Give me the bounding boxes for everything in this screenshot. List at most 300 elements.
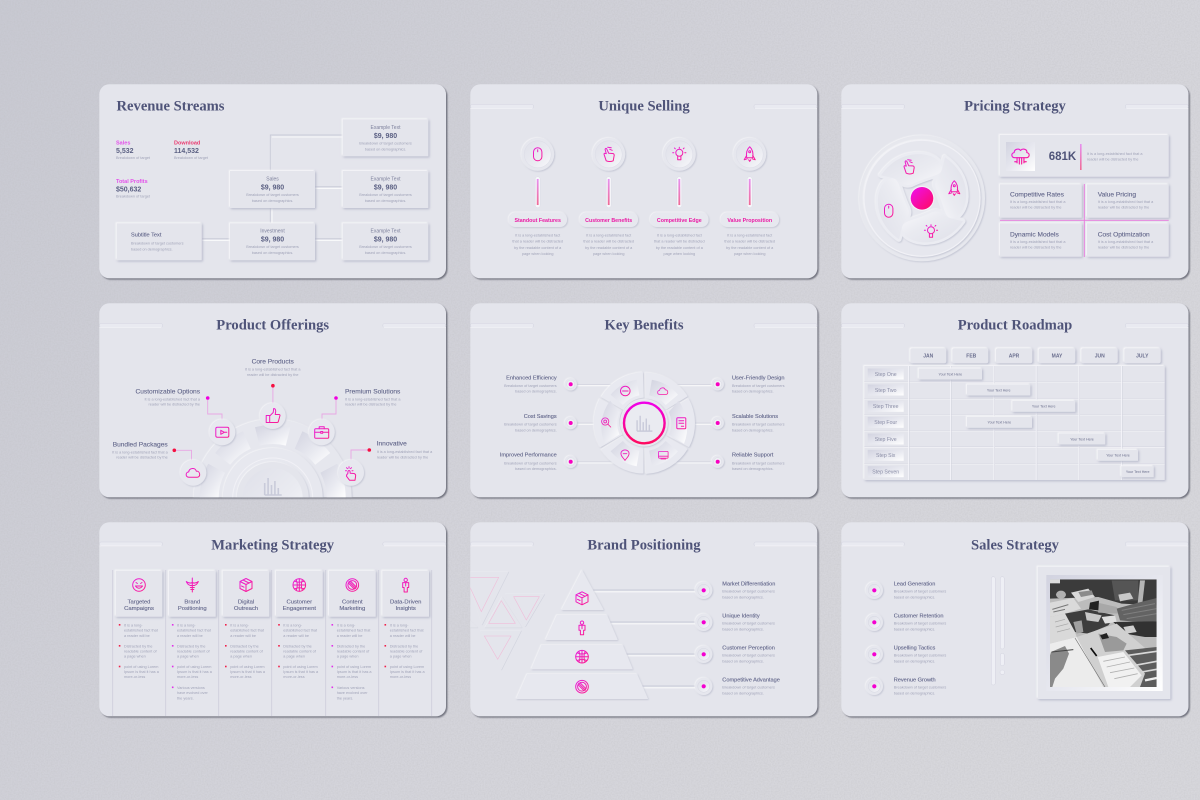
node: unique identity: Unique Identity [722, 614, 760, 620]
column: customer engagement: more-or-less [283, 675, 305, 679]
step labels: Step Six [876, 453, 896, 459]
box: example text 3: Example Text [371, 229, 401, 235]
item: value proposition [720, 138, 779, 256]
month headers: JAN [923, 354, 934, 360]
column: data-driven insights: a page when [390, 654, 412, 658]
item: customer benefits: that a reader will be distracted [583, 240, 634, 244]
stat: total profits: $50,632 [116, 186, 141, 193]
node: customer perception: Breakdown of target customers [722, 654, 775, 658]
stat: total profits [116, 179, 151, 198]
box: example text 2: based on demographics. [365, 199, 406, 203]
column: brand positioning: point of using Lorem [177, 665, 211, 669]
column: data-driven insights: established fact that [390, 629, 425, 633]
node: improved performance [500, 453, 577, 471]
item: standout features: It is a long-established fact [515, 234, 561, 238]
box: subtitle text: Breakdown of target customers [131, 242, 184, 246]
column: data-driven insights: Data-Driven [390, 600, 421, 606]
item: value proposition: It is a long-established fact [727, 234, 773, 238]
label: bundled packages: Bundled Packages [113, 442, 168, 449]
icon node: briefcase [309, 419, 335, 445]
node: enhanced efficiency [504, 375, 577, 394]
stat: sales: Sales [116, 140, 130, 146]
column: targeted campaigns: established fact that [124, 629, 159, 633]
column: targeted campaigns: a page when [124, 654, 146, 658]
step labels [868, 368, 904, 477]
item: revenue growth [866, 678, 946, 696]
title: Product Roadmap [958, 318, 1072, 334]
box: sales: based on demographics. [252, 199, 293, 203]
card: cost optimization [1087, 223, 1169, 257]
label: customizable options [135, 388, 201, 407]
column: digital outreach: Ipsum is that it has a [230, 670, 266, 674]
column: digital outreach: Distracted by the [230, 644, 259, 648]
title: Marketing Strategy [211, 537, 335, 553]
stat: download: Breakdown of target [174, 156, 209, 160]
item: competitive edge: by the readable content of a [656, 246, 704, 250]
box: sales: Breakdown of target customers [246, 193, 299, 197]
label: innovative: Innovative [377, 441, 407, 448]
card: cost optimization: Cost Optimization [1098, 232, 1150, 238]
column: data-driven insights [382, 571, 429, 679]
item: lead generation [866, 582, 946, 600]
label: innovative: It is a long-established fact that a [377, 450, 433, 454]
title: Product Offerings [216, 318, 329, 334]
card: value pricing: Value Pricing [1098, 192, 1136, 198]
pink cross divider [1000, 184, 1169, 257]
item: customer retention: Customer Retention [894, 614, 943, 620]
card: value pricing: reader will be distracted by the [1098, 205, 1149, 209]
node: unique identity [695, 614, 775, 632]
node: customer perception: based on demographics. [722, 660, 764, 664]
card: competitive rates: reader will be distracted by the [1010, 205, 1062, 209]
column: content marketing: Marketing [339, 606, 365, 612]
column: digital outreach: a page when [230, 654, 252, 658]
stat: sales [116, 140, 151, 160]
column: content marketing: a page when [337, 654, 358, 658]
item: customer benefits: page when looking [593, 252, 625, 256]
column: content marketing: the years. [337, 696, 353, 700]
gantt bars: Your Text Here [1106, 454, 1130, 458]
stat: sales: 5,532 [116, 148, 134, 155]
step labels: Step Two [875, 388, 897, 394]
gear diagram [193, 420, 353, 498]
label: core products: reader will be distracted by the [247, 373, 298, 377]
photo frame [1038, 567, 1170, 699]
node: market differentiation: Breakdown of target customers [722, 590, 775, 594]
item: standout features: that a reader will be distracted [512, 240, 563, 244]
item: lead generation: Lead Generation [894, 582, 935, 588]
gantt table [864, 366, 1165, 480]
box: investment: Breakdown of target customers [246, 245, 299, 249]
month headers [910, 348, 1161, 363]
column: digital outreach: Digital [238, 600, 254, 606]
column: brand positioning: Distracted by the [177, 644, 206, 648]
column: content marketing: more-or-less [337, 675, 358, 679]
item: customer benefits: by the readable content of a [585, 246, 633, 250]
box: example text 1: $9, 980 [374, 133, 397, 140]
box: subtitle text [117, 223, 202, 260]
label: customizable options: Customizable Options [135, 388, 201, 396]
node: user-friendly design [712, 375, 785, 394]
item: value proposition: page when looking [734, 252, 766, 256]
stat: download: 114,532 [174, 148, 199, 155]
node: cost savings: Cost Savings [524, 414, 557, 420]
panel: revenue streams [99, 84, 446, 278]
column: brand positioning: It is a long- [177, 624, 196, 628]
title: Sales Strategy [971, 537, 1060, 553]
node: scalable solutions: based on demographics. [732, 428, 774, 432]
step labels: Step Five [875, 437, 897, 443]
column: data-driven insights: readable content of [390, 649, 423, 653]
label: core products [245, 359, 301, 377]
photo: people working over documents [1050, 579, 1157, 687]
stat: total profits: Total Profits [116, 179, 148, 185]
month headers: JUN [1095, 354, 1105, 360]
column: customer engagement: It is a long- [283, 624, 303, 628]
title: Key Benefits [604, 318, 684, 334]
column: customer engagement: Customer [287, 600, 312, 606]
label: premium solutions: reader will be distracted by the [345, 403, 396, 407]
column: targeted campaigns: It is a long- [124, 624, 143, 628]
item: customer benefits: Customer Benefits [585, 218, 632, 224]
column: customer engagement: readable content of [283, 649, 317, 653]
box: example text 3 [343, 223, 428, 260]
label: core products: Core Products [252, 359, 294, 366]
card: value pricing [1087, 184, 1169, 218]
item: upselling tactics: based on demographics. [894, 660, 935, 664]
stat: download: Download [174, 140, 200, 146]
icon node: video [209, 419, 235, 445]
box: example text 3: Breakdown of target customers [359, 245, 412, 249]
stat card: 681K: 681K [1049, 151, 1077, 163]
segmented wheel [579, 360, 710, 486]
column: digital outreach: point of using Lorem [230, 665, 265, 669]
box: example text 1: Example Text [371, 125, 401, 131]
stat card: 681K: It is a long-established fact that a [1087, 152, 1143, 156]
node: competitive advantage: Competitive Advantage [722, 678, 780, 684]
item: competitive edge: Competitive Edge [657, 218, 702, 224]
node: reliable support: based on demographics. [732, 467, 774, 471]
node: cost savings [504, 414, 577, 432]
node: competitive advantage: based on demographics. [722, 692, 764, 696]
column: digital outreach: Outreach [234, 606, 258, 612]
node: market differentiation [695, 582, 775, 600]
node: cost savings: based on demographics. [515, 428, 557, 432]
connectors [202, 135, 343, 240]
column: data-driven insights: Distracted by the [390, 644, 418, 648]
title: Revenue Streams [117, 99, 225, 115]
stat: total profits: Breakdown of target [116, 194, 151, 198]
card: competitive rates [1000, 184, 1082, 218]
column: brand positioning: a page when [177, 654, 199, 658]
item: standout features: by the readable content of a [514, 246, 562, 250]
node: unique identity: based on demographics. [722, 628, 764, 632]
item: revenue growth: based on demographics. [894, 692, 935, 696]
item: customer retention: Breakdown of target customers [894, 622, 946, 626]
label: premium solutions: It is a long-established fact that a [345, 398, 401, 402]
label: premium solutions [345, 388, 401, 407]
item: customer retention [866, 614, 946, 632]
node: customer perception: Customer Perception [722, 646, 775, 652]
item: upselling tactics [866, 646, 946, 664]
box: investment: based on demographics. [252, 251, 293, 255]
column: brand positioning: readable content of [177, 649, 210, 653]
column: brand positioning: the years. [177, 696, 194, 700]
icon node: cloud [180, 460, 206, 486]
label: bundled packages: It is a long-established fact that a [112, 450, 169, 454]
column: targeted campaigns: readable content of [124, 649, 157, 653]
node: market differentiation: based on demographics. [722, 596, 764, 600]
item: competitive edge: It is a long-established fact [657, 234, 703, 238]
gantt bars [919, 368, 1154, 477]
column: content marketing: Ipsum is that it has a [337, 670, 372, 674]
column: brand positioning [169, 571, 216, 700]
title: Pricing Strategy [964, 99, 1067, 115]
panel: product offerings [99, 303, 448, 500]
column: targeted campaigns [116, 571, 162, 679]
card: competitive rates: Competitive Rates [1010, 192, 1065, 198]
column: digital outreach: It is a long- [230, 624, 250, 628]
node: enhanced efficiency: based on demographics. [515, 390, 557, 394]
column: content marketing: a reader will be [337, 634, 362, 638]
column: content marketing: Distracted by the [337, 644, 365, 648]
column: targeted campaigns: Distracted by the [124, 644, 152, 648]
column: content marketing: It is a long- [337, 624, 356, 628]
node: enhanced efficiency: Breakdown of target customers [504, 384, 557, 388]
stat card: 681K: reader will be distracted by the [1087, 157, 1138, 161]
column: customer engagement: established fact that [283, 629, 318, 633]
label: core products: It is a long-established fact that a [245, 368, 301, 372]
column: data-driven insights: Ipsum is that it has a [390, 670, 426, 674]
column: content marketing: Various versions [337, 686, 365, 690]
box: sales: Sales [266, 177, 279, 183]
column: customer engagement [276, 571, 323, 679]
item: revenue growth: Breakdown of target customers [894, 686, 946, 690]
card: dynamic models: It is a long-established fact that a [1010, 240, 1066, 244]
node: market differentiation: Market Differentiation [722, 582, 775, 588]
month headers: MAY [1052, 354, 1063, 360]
box: example text 1: Breakdown of target customers [359, 142, 412, 146]
month headers: FEB [966, 354, 977, 360]
vertical grooves [991, 577, 1005, 685]
column: targeted campaigns: a reader will be [124, 634, 150, 638]
column: data-driven insights: It is a long- [390, 624, 409, 628]
column: targeted campaigns: Ipsum is that it has a [124, 670, 160, 674]
node: customer perception [695, 646, 775, 664]
item: standout features [508, 138, 567, 256]
gantt bars: Your Text Here [1070, 437, 1094, 441]
panel: sales strategy [841, 522, 1188, 716]
column: brand positioning: Various versions [177, 686, 205, 690]
gantt bars: Your Text Here [988, 421, 1011, 425]
title: Unique Selling [598, 99, 690, 115]
column: digital outreach: a reader will be [230, 634, 256, 638]
card: dynamic models: reader will be distracted by the [1010, 245, 1062, 249]
label: customizable options: It is a long-established fact that a [144, 398, 201, 402]
pink connectors and dots [172, 384, 371, 460]
stat: sales: Breakdown of target [116, 156, 151, 160]
node: scalable solutions: Breakdown of target customers [732, 423, 785, 427]
column: content marketing [329, 571, 376, 700]
card: value pricing: It is a long-established fact that a [1098, 200, 1154, 204]
title: Brand Positioning [587, 537, 701, 553]
column: brand positioning: Positioning [178, 606, 207, 612]
icon node: thumbs up [260, 403, 286, 429]
box: investment: Investment [260, 229, 285, 235]
stat: download [174, 140, 209, 160]
column: brand positioning: Ipsum is that it has a [177, 670, 213, 674]
box: example text 1 [343, 119, 428, 156]
item: competitive edge [650, 138, 708, 256]
connector lines [593, 590, 696, 688]
column: customer engagement: a reader will be [283, 634, 309, 638]
card: dynamic models [1000, 223, 1082, 257]
column: digital outreach: more-or-less [230, 675, 252, 679]
column: content marketing: point of using Lorem [337, 665, 371, 669]
node: reliable support: Breakdown of target customers [732, 461, 785, 465]
column: brand positioning: have evolved over [177, 691, 209, 695]
item: customer benefits: It is a long-established fact [586, 234, 632, 238]
label: innovative [377, 441, 433, 459]
connector grooves [576, 384, 712, 463]
label: customizable options: reader will be distracted by the [148, 403, 200, 407]
node: user-friendly design: based on demographics. [732, 390, 774, 394]
node: improved performance: based on demographics. [515, 467, 557, 471]
stat card: 681K [1000, 135, 1169, 177]
item: standout features: page when looking [522, 252, 554, 256]
column: data-driven insights: point of using Lorem [390, 665, 424, 669]
node: improved performance: Breakdown of target customers [504, 461, 557, 465]
item: competitive edge: page when looking [663, 252, 695, 256]
gantt bars: Your Text Here [1032, 405, 1055, 409]
gantt bars: Your Text Here [987, 388, 1010, 392]
box: investment: $9, 980 [261, 237, 284, 244]
node: competitive advantage: Breakdown of target customers [722, 686, 775, 690]
column: content marketing: readable content of [337, 649, 370, 653]
box: example text 1: based on demographics. [365, 148, 406, 152]
swirl wheel diagram [859, 135, 985, 261]
column: content marketing: established fact that [337, 629, 371, 633]
panel: brand positioning [464, 522, 817, 716]
node: cost savings: Breakdown of target customers [504, 423, 557, 427]
box: subtitle text: Subtitle Text [131, 232, 162, 238]
column: targeted campaigns: more-or-less [124, 675, 145, 679]
column: customer engagement: Ipsum is that it has a [283, 670, 319, 674]
item: customer benefits [580, 138, 638, 256]
card: cost optimization: It is a long-established fact that a [1098, 240, 1154, 244]
label: innovative: reader will be distracted by the [377, 455, 428, 459]
box: sales [230, 171, 315, 208]
box: example text 3: based on demographics. [365, 251, 406, 255]
item: standout features: Standout Features [514, 218, 561, 224]
column: customer engagement: Engagement [283, 606, 316, 612]
column: content marketing: have evolved over [337, 691, 368, 695]
label: premium solutions: Premium Solutions [345, 388, 401, 396]
column dividers [113, 570, 432, 716]
box: subtitle text: based on demographics. [131, 248, 173, 252]
step labels: Step One [875, 372, 897, 378]
pyramid [516, 570, 648, 699]
item: competitive edge: that a reader will be distracted [654, 240, 705, 244]
card: competitive rates: It is a long-established fact that a [1010, 200, 1066, 204]
column: targeted campaigns: Targeted [128, 600, 150, 606]
node: scalable solutions: Scalable Solutions [732, 414, 778, 420]
node: competitive advantage [695, 678, 780, 696]
item: upselling tactics: Breakdown of target customers [894, 654, 946, 658]
column: digital outreach: established fact that [230, 629, 265, 633]
gantt bars: Your Text Here [1126, 470, 1149, 474]
box: example text 3: $9, 980 [374, 237, 397, 244]
card: cost optimization: reader will be distracted by the [1098, 245, 1149, 249]
column: targeted campaigns: Campaigns [124, 606, 154, 612]
panel: unique selling [470, 84, 817, 278]
node: user-friendly design: Breakdown of target customers [732, 384, 785, 388]
item: value proposition: by the readable content of a [726, 246, 774, 250]
column: customer engagement: Distracted by the [283, 644, 312, 648]
column: digital outreach [223, 571, 269, 679]
box: example text 2 [343, 171, 428, 208]
node: improved performance: Improved Performance [500, 453, 557, 459]
wheel icons [602, 386, 686, 460]
item: customer retention: based on demographics. [894, 628, 935, 632]
panel: key benefits [470, 303, 817, 497]
node: unique identity: Breakdown of target customers [722, 622, 775, 626]
step labels: Step Three [873, 404, 899, 410]
box: example text 2: Example Text [371, 177, 401, 183]
label: bundled packages [112, 442, 169, 460]
column: customer engagement: point of using Lorem [283, 665, 318, 669]
item: lead generation: Breakdown of target customers [894, 590, 946, 594]
box: investment [230, 223, 315, 260]
panel: pricing strategy [841, 84, 1188, 278]
column: brand positioning: more-or-less [177, 675, 198, 679]
panel: product roadmap [841, 303, 1188, 497]
box: example text 2: $9, 980 [374, 185, 397, 192]
column: data-driven insights: more-or-less [390, 675, 411, 679]
column: digital outreach: readable content of [230, 649, 264, 653]
node: reliable support [712, 453, 785, 471]
pyramid icons [576, 592, 588, 693]
column: brand positioning: established fact that [177, 629, 212, 633]
item: lead generation: based on demographics. [894, 596, 935, 600]
column: content marketing: Content [342, 600, 363, 606]
column: customer engagement: a page when [283, 654, 305, 658]
item: revenue growth: Revenue Growth [894, 678, 936, 684]
decorative triangles [464, 572, 545, 670]
node: reliable support: Reliable Support [732, 453, 774, 459]
item: value proposition: that a reader will be distracted [724, 240, 775, 244]
column: brand positioning: Brand [184, 600, 200, 606]
label: bundled packages: reader will be distracted by the [116, 456, 168, 460]
column: targeted campaigns: point of using Lorem [124, 665, 158, 669]
node: scalable solutions [712, 414, 785, 432]
icon node: touch [338, 460, 364, 486]
column: data-driven insights: a reader will be [390, 634, 416, 638]
column: brand positioning: a reader will be [177, 634, 203, 638]
node: user-friendly design: User-Friendly Design [732, 375, 785, 381]
item: upselling tactics: Upselling Tactics [894, 646, 935, 652]
month headers: JULY [1136, 354, 1149, 360]
step labels: Step Seven [872, 470, 899, 476]
node: enhanced efficiency: Enhanced Efficiency [506, 375, 557, 381]
item: value proposition: Value Proposition [727, 218, 772, 224]
box: example text 2: Breakdown of target customers [359, 193, 412, 197]
panel: marketing strategy [99, 522, 446, 716]
step labels: Step Four [874, 420, 897, 426]
box: sales: $9, 980 [261, 185, 284, 192]
column: data-driven insights: Insights [396, 606, 416, 612]
month headers: APR [1009, 354, 1020, 360]
